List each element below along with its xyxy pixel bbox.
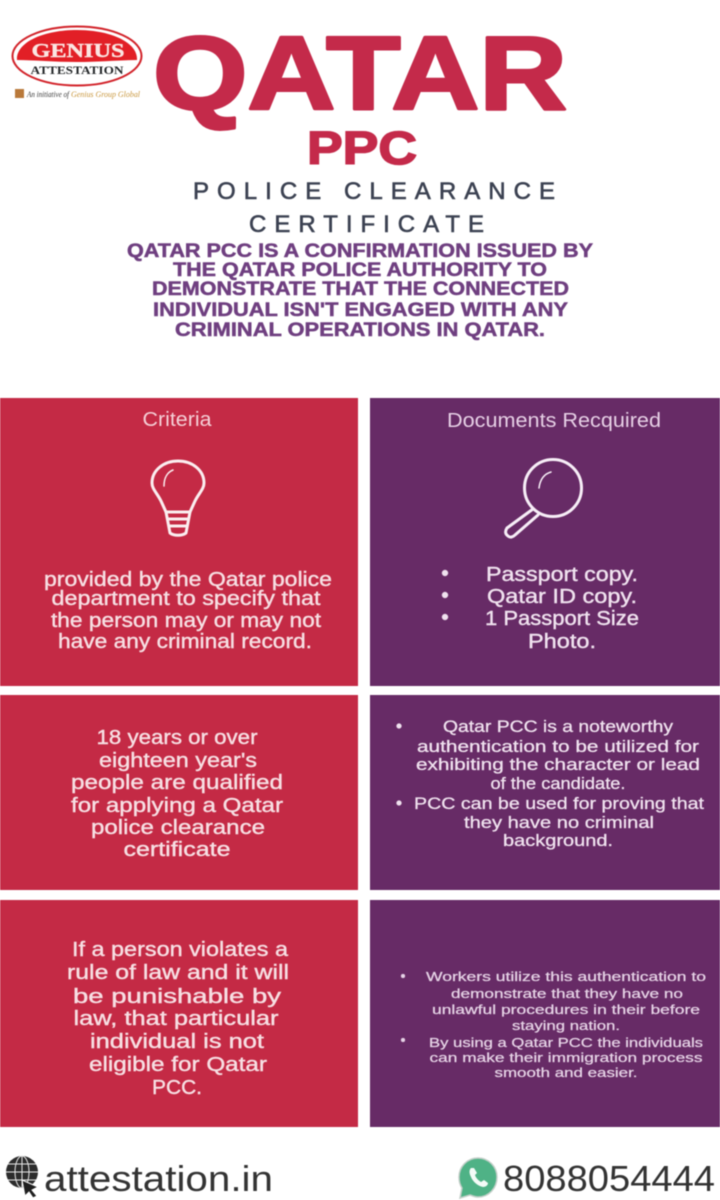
intro paragraph: QATAR PCC IS A CONFIRMATION ISSUED BY: [127, 240, 593, 262]
documents list: Qatar ID copy.: [487, 586, 637, 608]
criteria text: [44, 569, 332, 653]
ineligibility text: be punishable by: [73, 986, 281, 1008]
phone contact: 8088054444: [503, 1158, 715, 1199]
criteria text: the person may or may not: [51, 610, 322, 632]
logo: Genius Attestation: [12, 26, 142, 99]
logo: Genius Attestation: GENIUS: [32, 40, 125, 62]
benefits text: By using a Qatar PCC the individuals: [429, 1035, 704, 1050]
logo: Genius Attestation: An initiative of: [26, 90, 71, 99]
benefits text: can make their immigration process: [430, 1050, 703, 1065]
documents list: [442, 564, 639, 653]
ineligibility text: PCC.: [152, 1077, 202, 1099]
panel: age eligibility: [0, 695, 358, 890]
panel: documents required: [370, 398, 720, 686]
uses text: Qatar PCC is a noteworthy: [443, 717, 674, 736]
uses text: background.: [503, 831, 613, 850]
intro paragraph: THE QATAR POLICE AUTHORITY TO: [173, 259, 547, 281]
website contact: attestation.in: [44, 1158, 273, 1199]
uses text: [396, 717, 704, 850]
intro paragraph: INDIVIDUAL ISN'T ENGAGED WITH ANY: [153, 299, 568, 321]
age eligibility text: certificate: [124, 839, 230, 861]
ineligibility text: If a person violates a: [72, 939, 289, 961]
age eligibility text: people are qualified: [71, 772, 283, 794]
criteria text: have any criminal record.: [58, 631, 312, 653]
heading: police clearance certificate: CERTIFICATE: [249, 211, 484, 238]
benefits text: demonstrate that they have no: [451, 986, 683, 1001]
icon: whatsapp: [459, 1158, 497, 1198]
benefits text: unlawful procedures in their before: [432, 1002, 700, 1017]
panel: benefits: [370, 900, 720, 1127]
documents list: 1 Passport Size: [485, 608, 639, 630]
panel: criteria: [0, 398, 358, 686]
heading: police clearance certificate: POLICE CLEARANCE: [193, 178, 555, 205]
heading: police clearance certificate: [193, 178, 555, 238]
heading: criteria: Criteria: [142, 409, 212, 431]
ineligibility text: individual is not: [90, 1031, 265, 1053]
icon: magnifying glass: [506, 460, 582, 537]
intro paragraph: [127, 240, 593, 341]
documents list: Passport copy.: [486, 564, 638, 586]
logo: Genius Attestation: Genius Group Global: [71, 90, 141, 99]
age eligibility text: eighteen year's: [99, 750, 257, 772]
age eligibility text: [71, 727, 283, 861]
subtitle: PPC: PPC: [307, 122, 417, 174]
criteria text: department to specify that: [52, 588, 321, 610]
uses text: exhibiting the character or lead: [416, 755, 700, 774]
logo: Genius Attestation: ATTESTATION: [30, 65, 124, 77]
title: QATAR: QATAR: [153, 16, 567, 132]
benefits text: staying nation.: [512, 1018, 620, 1033]
ineligibility text: eligible for Qatar: [89, 1054, 267, 1076]
intro paragraph: DEMONSTRATE THAT THE CONNECTED: [152, 278, 569, 300]
criteria text: provided by the Qatar police: [44, 569, 332, 591]
intro paragraph: CRIMINAL OPERATIONS IN QATAR.: [175, 319, 545, 341]
ineligibility text: law, that particular: [74, 1008, 279, 1030]
icon: light bulb: [152, 461, 204, 535]
ineligibility text: [67, 939, 289, 1099]
age eligibility text: police clearance: [91, 817, 265, 839]
icon: globe with cursor: [6, 1156, 38, 1198]
uses text: PCC can be used for proving that: [414, 794, 704, 813]
benefits text: smooth and easier.: [494, 1065, 638, 1080]
age eligibility text: 18 years or over: [96, 727, 258, 749]
panel: uses of PCC: [370, 695, 720, 890]
uses text: authentication to be utilized for: [417, 737, 699, 756]
panel: ineligibility: [0, 900, 358, 1127]
benefits text: [401, 969, 706, 1080]
heading: documents required: Documents Recquired: [447, 410, 661, 432]
documents list: Photo.: [528, 631, 596, 653]
uses text: of the candidate.: [490, 774, 626, 793]
uses text: they have no criminal: [464, 813, 654, 832]
ineligibility text: rule of law and it will: [67, 962, 289, 984]
age eligibility text: for applying a Qatar: [71, 795, 283, 817]
benefits text: Workers utilize this authentication to: [426, 969, 706, 984]
